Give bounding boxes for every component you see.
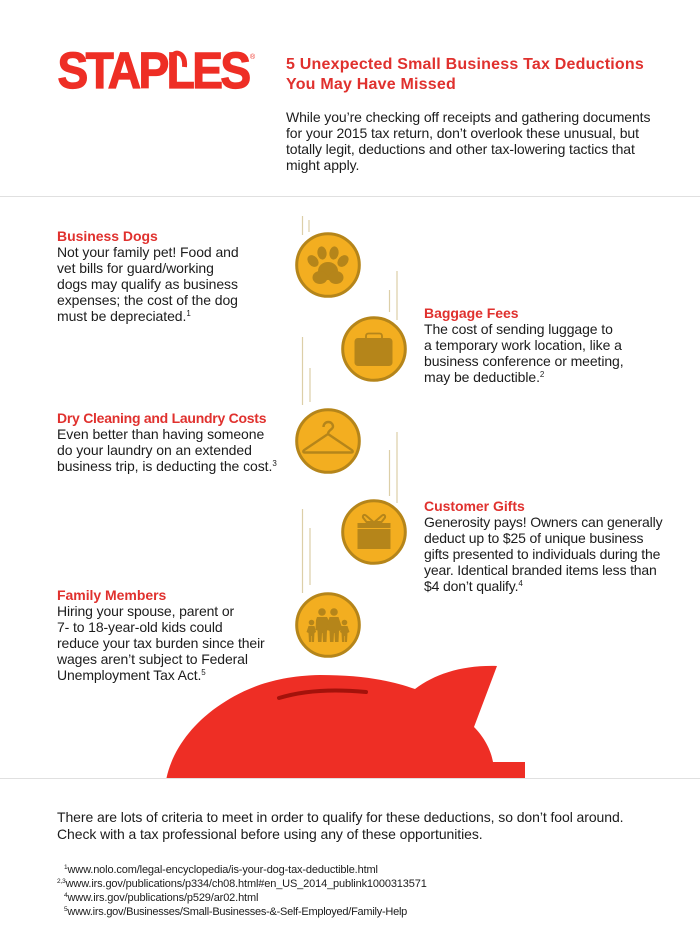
closing text: Check with a tax professional before using any of these opportunities.	[57, 826, 483, 842]
title	[286, 56, 644, 93]
intro text	[286, 109, 650, 173]
text: family members: Unemployment Tax Act.5	[57, 667, 206, 683]
text: dry cleaning: business trip, is deducting the cost.3	[57, 458, 277, 474]
footnotes: 5www.irs.gov/Businesses/Small-Businesses-&-Self-Employed/Family-Help	[64, 906, 407, 918]
text: dry cleaning: do your laundry on an extended	[57, 442, 252, 458]
text: business dogs: expenses; the cost of the dog	[57, 292, 238, 308]
text: customer gifts: Customer Gifts	[424, 498, 525, 514]
title: You May Have Missed	[286, 76, 456, 93]
text: customer gifts: Generosity pays! Owners can generally	[424, 514, 662, 530]
text: dry cleaning	[57, 410, 277, 474]
logo: STAPLES	[58, 43, 250, 100]
closing text: There are lots of criteria to meet in order to qualify for these deductions, so don’t fool around.	[57, 809, 623, 825]
intro text: totally legit, deductions and other tax-lowering tactics that	[286, 141, 635, 157]
title: 5 Unexpected Small Business Tax Deductions	[286, 56, 644, 73]
intro text: might apply.	[286, 157, 359, 173]
footnotes	[57, 864, 427, 918]
text: dry cleaning: Even better than having someone	[57, 426, 264, 442]
text: customer gifts: $4 don’t qualify.4	[424, 578, 523, 594]
text: baggage fees	[424, 305, 624, 385]
text: business dogs: must be depreciated.1	[57, 308, 191, 324]
icon: hanger coin	[297, 410, 359, 472]
text: customer gifts: year. Identical branded items less than	[424, 562, 657, 578]
text: family members: reduce your tax burden since their	[57, 635, 265, 651]
text: business dogs: dogs may qualify as business	[57, 276, 238, 292]
text: family members: Family Members	[57, 587, 166, 603]
text: baggage fees: The cost of sending luggage to	[424, 321, 613, 337]
footnotes: 2,3www.irs.gov/publications/p334/ch08.html#en_US_2014_publink1000313571	[57, 878, 427, 890]
text: baggage fees: may be deductible.2	[424, 369, 544, 385]
icon: family coin	[297, 594, 359, 656]
text: family members	[57, 587, 265, 683]
text: baggage fees: business conference or meeting,	[424, 353, 624, 369]
intro text: While you’re checking off receipts and gathering documents	[286, 109, 650, 125]
text: customer gifts	[424, 498, 663, 594]
text: business dogs	[57, 228, 239, 324]
text: business dogs: vet bills for guard/working	[57, 260, 214, 276]
text: business dogs: Not your family pet! Food and	[57, 244, 239, 260]
piggy bank	[166, 666, 525, 778]
text: family members: 7- to 18-year-old kids could	[57, 619, 223, 635]
text: baggage fees: Baggage Fees	[424, 305, 519, 321]
text: customer gifts: deduct up to $25 of unique business	[424, 530, 643, 546]
logo: ®	[250, 53, 256, 61]
intro text: for your 2015 tax return, don’t overlook these unusual, but	[286, 125, 639, 141]
text: dry cleaning: Dry Cleaning and Laundry Costs	[57, 410, 266, 426]
footnotes: 4www.irs.gov/publications/p529/ar02.html	[64, 892, 258, 904]
footnotes: 1www.nolo.com/legal-encyclopedia/is-your-dog-tax-deductible.html	[64, 864, 378, 876]
icon: gift coin	[343, 501, 405, 563]
closing text	[57, 809, 623, 842]
text: family members: wages aren’t subject to Federal	[57, 651, 248, 667]
text: business dogs: Business Dogs	[57, 228, 158, 244]
text: customer gifts: gifts presented to individuals during the	[424, 546, 660, 562]
motion lines	[302, 216, 397, 593]
text: family members: Hiring your spouse, parent or	[57, 603, 234, 619]
icon: briefcase coin	[343, 318, 405, 380]
icon: paw coin	[297, 234, 359, 296]
text: baggage fees: a temporary work location, like a	[424, 337, 622, 353]
